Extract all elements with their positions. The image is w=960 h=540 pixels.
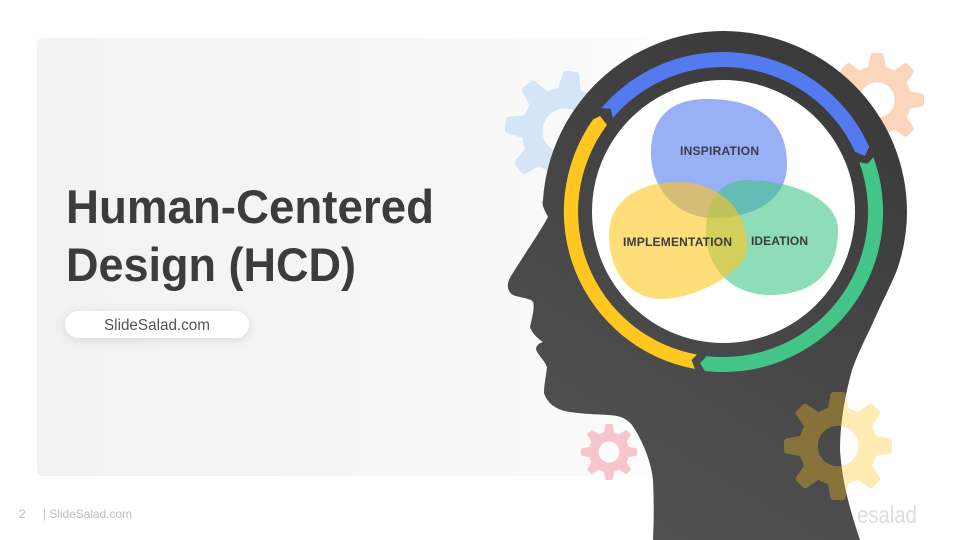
label: implementation: IMPLEMENTATION bbox=[623, 235, 732, 249]
arrow segment: yellow bbox=[564, 116, 697, 369]
title: Human-Centered bbox=[66, 180, 434, 233]
label: ideation: IDEATION bbox=[751, 234, 808, 248]
arrow segment: blue bbox=[601, 52, 869, 156]
title bbox=[66, 180, 434, 291]
panel: title background bbox=[37, 38, 650, 476]
blob: inspiration bbox=[651, 99, 787, 218]
icon: peach gear bbox=[833, 56, 921, 144]
progress ring bbox=[564, 52, 883, 372]
pill label: SlideSalad.com: SlideSalad.com bbox=[104, 317, 210, 334]
icon: yellow gear overlapping head bbox=[787, 395, 889, 497]
icon: blue gear bbox=[503, 69, 627, 193]
footer page number and site: 2 bbox=[19, 507, 26, 521]
head silhouette bbox=[508, 31, 907, 540]
pill label: SlideSalad.com bbox=[65, 311, 249, 338]
watermark text: esalad bbox=[857, 502, 917, 529]
white circle bbox=[592, 80, 855, 343]
blob: ideation bbox=[706, 180, 838, 295]
title: Design (HCD) bbox=[66, 238, 356, 291]
label: inspiration: INSPIRATION bbox=[680, 144, 759, 158]
blob: implementation bbox=[609, 182, 747, 299]
icon: pink gear bbox=[583, 426, 635, 478]
arrow segment: green bbox=[700, 157, 883, 372]
venn diagram bbox=[609, 99, 838, 299]
footer page number and site: | SlideSalad.com bbox=[43, 507, 132, 521]
